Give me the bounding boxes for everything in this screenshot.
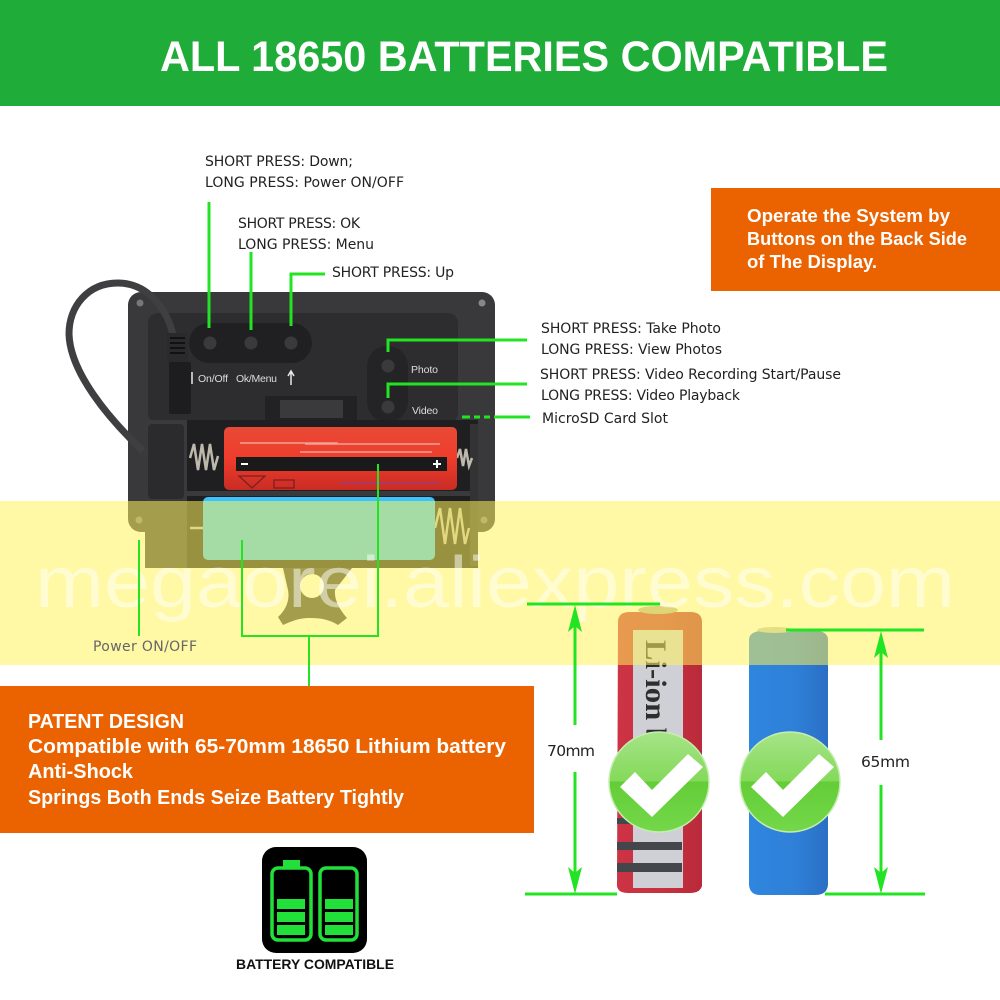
icon: battery compatible [262, 847, 367, 953]
button group: On/Off [198, 373, 228, 385]
photo and video buttons: Video [412, 405, 438, 417]
dimension: 65mm: 65mm [861, 753, 910, 771]
title: ALL 18650 BATTERIES COMPATIBLE [160, 33, 888, 81]
watermark text: megaorei.aliexpress.com [35, 543, 955, 623]
label: video: SHORT PRESS: Video Recording Start/Pause [540, 367, 841, 383]
label: ok / menu: SHORT PRESS: OK [238, 216, 361, 232]
callout: operate the system: of The Display. [747, 252, 877, 272]
dimension: 65mm [786, 630, 925, 894]
callout: patent design: Compatible with 65-70mm 18650 Lithium battery [28, 736, 507, 758]
instruction labels: LONG PRESS: Menu [238, 237, 374, 253]
header banner [0, 0, 1000, 106]
photo and video buttons: Photo [411, 364, 438, 376]
callout: patent design: Anti-Shock [28, 761, 134, 783]
battery photo: 65mm blue cell [749, 627, 828, 895]
button group [189, 323, 312, 385]
callout: patent design: PATENT DESIGN [28, 711, 184, 733]
display housing [128, 292, 495, 532]
USB plug [167, 333, 191, 414]
cable [69, 283, 173, 451]
button group: Ok/Menu [236, 373, 277, 385]
icon: check mark on red cell [609, 732, 709, 832]
yellow watermark band [0, 501, 1000, 665]
battery photo: 70mm red cell [617, 606, 702, 893]
icon: check mark on blue cell [740, 732, 840, 832]
callout: patent design: Springs Both Ends Seize Battery Tightly [28, 787, 405, 809]
icon caption: BATTERY COMPATIBLE [236, 956, 394, 972]
instruction labels: LONG PRESS: Power ON/OFF [205, 175, 404, 191]
dimension: 70mm [525, 604, 660, 894]
callout: operate the system [711, 188, 1000, 291]
instruction labels [93, 154, 841, 655]
dimension: 70mm: 70mm [547, 742, 595, 760]
instruction labels: LONG PRESS: View Photos [541, 342, 722, 358]
blue battery [203, 497, 435, 560]
label: photo: SHORT PRESS: Take Photo [541, 321, 721, 337]
callout: patent design [0, 686, 534, 833]
stand [278, 568, 352, 625]
label: up: SHORT PRESS: Up [332, 265, 454, 281]
green callout lines [139, 202, 530, 686]
label: down / power: SHORT PRESS: Down; [205, 154, 353, 170]
battery compartment [145, 420, 478, 568]
callout: operate the system: Buttons on the Back Side [747, 229, 967, 249]
rotated battery label: Li-ion b [639, 640, 672, 745]
photo: display back with battery compartment [69, 283, 495, 625]
red battery [224, 427, 457, 490]
springs [190, 444, 472, 544]
photo and video buttons [367, 346, 438, 422]
callout: operate the system: Operate the System by [747, 206, 950, 226]
label: power switch: Power ON/OFF [93, 639, 197, 655]
hinge [265, 396, 357, 420]
instruction labels: LONG PRESS: Video Playback [541, 388, 741, 404]
label: card slot: MicroSD Card Slot [542, 411, 668, 427]
